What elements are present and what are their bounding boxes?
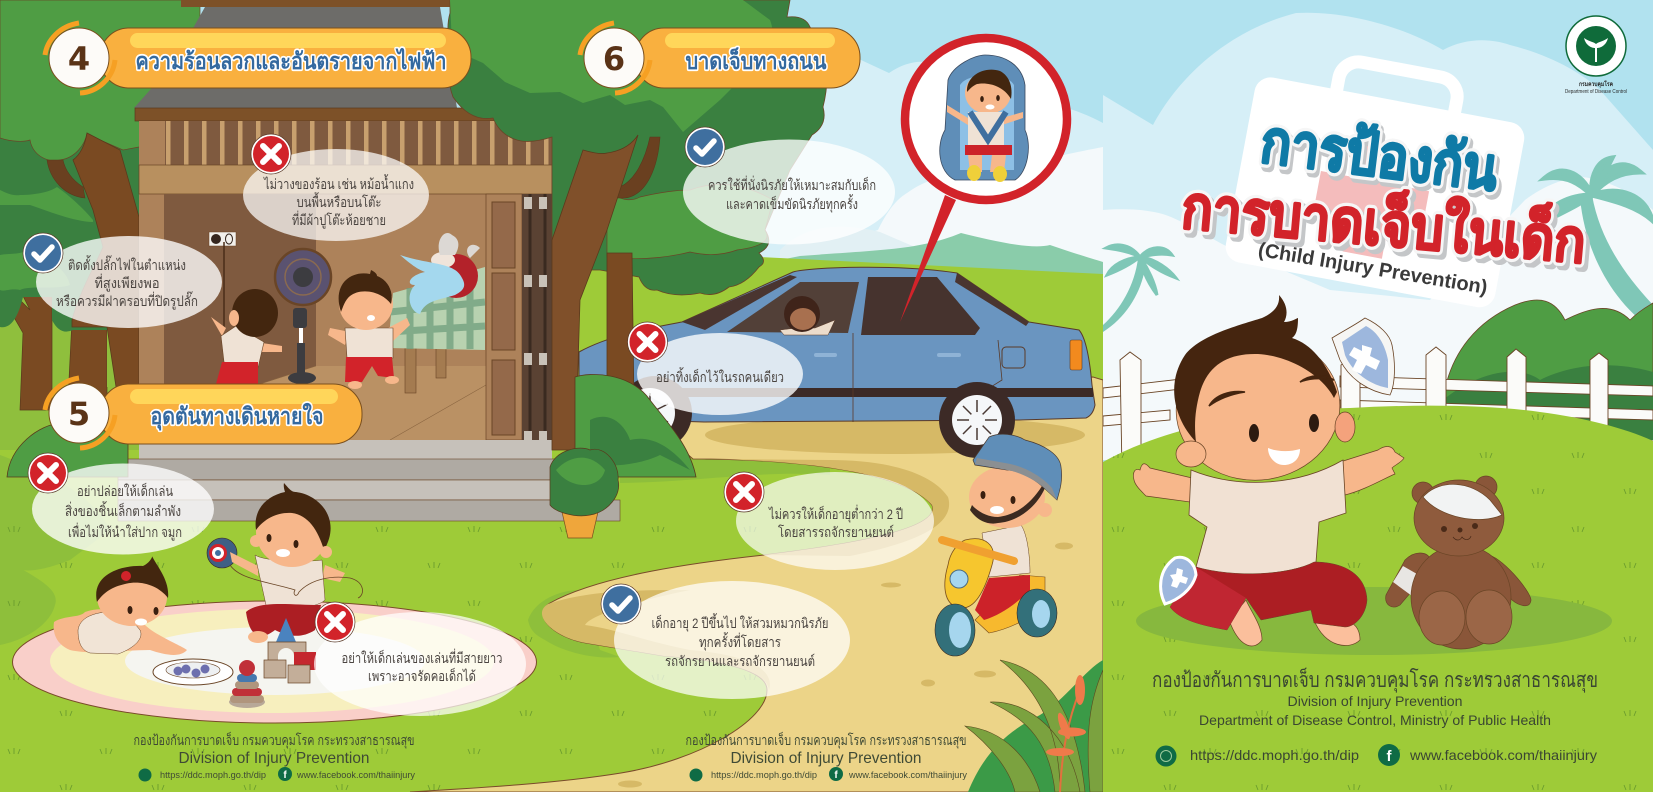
footer: left page credits: f (283, 770, 287, 781)
callout: wear helmet: เด็กอายุ 2 ปีขึ้นไป ให้สวมหมวกนิรภัย (652, 613, 828, 632)
heading: section 4: ความร้อนลวกและอันตรายจากไฟฟ้า (136, 47, 446, 74)
footer: left page credits: www.facebook.com/thaiinjury (296, 770, 415, 781)
car seat (940, 55, 1028, 182)
back trunk (607, 253, 634, 405)
panel: cover page (1103, 0, 1653, 792)
callout: small objects: เพื่อไม่ให้นำใส่ปาก จมูก (68, 523, 182, 541)
background: lawn (0, 257, 1103, 792)
canopy light layer (450, 0, 772, 132)
background: distant hills (780, 233, 1103, 276)
callout: do not place hot things: ไม่วางของร้อน เช่น หม้อน้ำแกง (263, 174, 414, 192)
right tree (448, 0, 827, 450)
footer: middle page credits: f (834, 770, 838, 781)
subtitle: (Child Injury Prevention) (1257, 239, 1489, 299)
callout: install sockets high: หรือควรมีฝาครอบที่ปิดรูปลั๊ก (56, 291, 198, 310)
white fence (1103, 347, 1653, 470)
shorts (975, 575, 1030, 620)
callout: wear helmet: ทุกครั้งที่โดยสาร (699, 632, 781, 651)
palm tree right (1539, 158, 1653, 330)
callout: do not leave alone in car (628, 322, 803, 415)
sitting toddler (230, 483, 363, 643)
footer: cover credits: Department of Disease Control, Ministry of Public Health (1199, 712, 1551, 728)
arms (1133, 446, 1404, 502)
head (969, 466, 1045, 528)
footer: left page credits: Division of Injury Prevention (178, 750, 370, 767)
callout: long string toys: อย่าให้เด็กเล่นของเล่นที่มีสายยาว (342, 649, 502, 666)
callout: do not leave alone in car: อย่าทิ้งเด็กไว้ในรถคนเดียว (656, 367, 784, 385)
main child character (1133, 295, 1404, 646)
footer: left page credits (134, 731, 415, 782)
rear wheel (939, 382, 1015, 458)
heading: section 4 (45, 23, 471, 93)
car windows (727, 277, 980, 335)
footer: middle page credits: Division of Injury Prevention (730, 750, 922, 767)
canopy middle lobe (607, 184, 773, 259)
title line 1: การป้องกัน (1257, 108, 1502, 203)
callout: under 2 no motorcycle: ไม่ควรให้เด็กอายุต่ำกว่า 2 ปี (768, 505, 903, 523)
child in car (780, 296, 835, 335)
cover sky and clouds (1103, 0, 1653, 500)
callout: small objects (28, 453, 214, 554)
background: left tree (0, 0, 200, 400)
footer: left page credits: กองป้องกันการบาดเจ็บ กรมควบคุมโรค กระทรวงสาธารณสุข (134, 731, 414, 749)
brows (1209, 376, 1334, 406)
footer: left page credits: https://ddc.moph.go.th/dip (160, 770, 266, 781)
roof (134, 0, 552, 121)
teddy bear (1386, 476, 1531, 649)
footer: cover credits: f (1386, 748, 1392, 765)
canopy dark layer (448, 0, 827, 295)
scooter rear body (975, 575, 1045, 633)
title line 1: การป้องกัน (1260, 112, 1504, 208)
callout: long string toys: เพราะอาจรัดคอเด็กได้ (368, 667, 476, 684)
cover title (1179, 108, 1593, 280)
callout: use car seat: ควรใช้ที่นั่งนิรภัยให้เหมาะสมกับเด็ก (708, 176, 876, 193)
heading: section 5: 5 (68, 395, 90, 433)
callout: wear helmet (601, 581, 850, 699)
callout: install sockets high (23, 233, 222, 328)
potted plant (550, 448, 619, 538)
background: sky and clouds of left spread (0, 0, 1103, 300)
feet (1229, 600, 1360, 646)
yo-yo toy (207, 538, 237, 568)
callout: do not place hot things: ที่มีผ้าปูโต๊ะห้อยชาย (292, 211, 386, 229)
heading: section 6: บาดเจ็บทางถนน (686, 46, 827, 74)
front wheel (618, 376, 692, 450)
logo: ministry seal: Department of Disease Control (1565, 89, 1627, 95)
callout: small objects: อย่าปล่อยให้เด็กเล่น (77, 482, 173, 499)
footer: cover credits: Division of Injury Prevention (1288, 693, 1462, 709)
house (118, 0, 620, 521)
background: far left lawn and tree trunks (0, 280, 145, 450)
heading: section 4: 4 (68, 40, 90, 78)
footer: middle page credits: https://ddc.moph.go.th/dip (711, 770, 817, 781)
branch (617, 137, 660, 198)
steps (118, 440, 620, 521)
heading: section 6: 6 (603, 40, 625, 78)
background: darker lawn patches (0, 455, 830, 658)
heading: section 6 (580, 23, 860, 93)
cover lawn (1103, 406, 1653, 792)
callout: long string toys (314, 602, 526, 716)
callout: use car seat (683, 127, 895, 244)
head (1167, 325, 1349, 491)
callout: install sockets high: ติดตั้งปลั๊กไฟในตำแหน่ง (68, 255, 186, 273)
heading: section 5: อุดตันทางเดินหายใจ (150, 402, 324, 431)
child from behind (211, 289, 282, 384)
panel: section 5 choking (12, 378, 536, 782)
callout bubble: child in car seat (900, 38, 1067, 322)
footer: middle page credits (686, 731, 967, 782)
child being splashed (328, 270, 410, 389)
background: bush by car (575, 374, 696, 477)
footer: cover credits (1152, 666, 1598, 766)
standing fan (275, 249, 331, 384)
shirt (1189, 460, 1346, 575)
helmet (973, 434, 1062, 500)
table with cloth (388, 267, 485, 393)
heading: section 5 (45, 378, 362, 448)
title line 2: การบาดเจ็บในเด็ก (1179, 171, 1589, 276)
plate with marbles (153, 659, 233, 685)
background: lawn tufts (0, 521, 780, 792)
title line 1: การป้องกัน (1257, 108, 1502, 203)
callout: do not place hot things: บนพื้นหรือบนโต๊ะ (296, 192, 382, 210)
play mat (12, 601, 536, 723)
title line 2: การบาดเจ็บในเด็ก (1179, 171, 1589, 276)
footer: middle page credits: www.facebook.com/thaiinjury (848, 770, 967, 781)
hair (1174, 295, 1337, 442)
scooter front (945, 539, 993, 608)
stacking rings toy (229, 660, 265, 708)
bush behind fence (1443, 300, 1653, 440)
cover lawn tufts (1103, 406, 1653, 792)
ground shadow (1136, 587, 1612, 655)
callout: install sockets high: ที่สูงเพียงพอ (94, 274, 160, 292)
panel: section 4 burns and electric hazards (23, 23, 485, 393)
callout: use car seat: และคาดเข็มขัดนิรภัยทุกครั้ง (726, 194, 858, 213)
wooden blocks (264, 618, 316, 683)
logo: ministry seal (1565, 16, 1627, 95)
panel: section 6 road injuries (580, 23, 1103, 792)
spilled pot and water (400, 233, 480, 314)
callout: do not place hot things (243, 134, 429, 241)
logo: ministry seal: กรมควบคุมโรค (1579, 80, 1613, 88)
footer: cover credits: www.facebook.com/thaiinjury (1409, 747, 1597, 763)
first aid kit (1223, 44, 1533, 310)
main trunk (552, 135, 638, 450)
wheels (1017, 589, 1057, 637)
palm tree left (1103, 245, 1176, 332)
callout: under 2 no motorcycle: โดยสารรถจักรยานยนต์ (778, 524, 894, 540)
ears (1176, 441, 1206, 467)
pants (1170, 562, 1367, 630)
car (579, 267, 1095, 458)
footer: cover credits: https://ddc.moph.go.th/dip (1190, 747, 1359, 763)
eyes and smile (1249, 424, 1259, 442)
callout: under 2 no motorcycle (724, 472, 934, 570)
title line 2: การบาดเจ็บในเด็ก (1183, 175, 1592, 280)
callout: small objects: สิ่งของชิ้นเล็กตามลำพัง (65, 501, 181, 519)
child on scooter with helmet (935, 434, 1062, 656)
wall socket (209, 232, 236, 330)
callout: wear helmet: รถจักรยานและรถจักรยานยนต์ (665, 653, 815, 669)
background: sandy path (410, 377, 1103, 792)
shield top (1332, 318, 1394, 395)
shirt (982, 525, 1030, 577)
shield bottom (1161, 557, 1196, 604)
background: bush behind step (7, 420, 128, 477)
crawling baby (54, 556, 187, 655)
footer: middle page credits: กองป้องกันการบาดเจ็บ กรมควบคุมโรค กระทรวงสาธารณสุข (686, 731, 966, 749)
foreground plant (965, 660, 1103, 792)
